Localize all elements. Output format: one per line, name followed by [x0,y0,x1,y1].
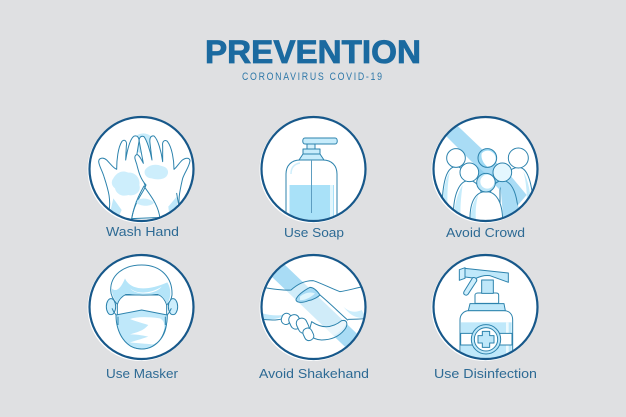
label: Avoid Crowd [446,225,525,240]
icon: washing hands [99,133,190,222]
ring [434,117,538,221]
panel: use soap [260,117,366,240]
label: Avoid Shakehand [259,366,369,381]
icon: spray bottle [459,268,513,362]
ring [434,255,538,359]
icon: crowd crossed out [442,123,533,222]
panel: wash hand [88,117,194,239]
ring [262,117,366,221]
icon: soap bottle [286,138,337,225]
label: Use Soap [284,225,344,240]
panel: avoid crowd [432,117,538,240]
label: Use Disinfection [434,366,537,381]
label: Wash Hand [106,224,179,239]
panel: use masker [88,255,194,381]
icon: handshake crossed out [262,263,367,348]
label: Use Masker [106,366,179,381]
ring [262,255,366,359]
panel: avoid shakehand [259,255,369,381]
panel: use disinfection [432,255,538,381]
ring [90,117,194,221]
title: PREVENTION [205,34,421,70]
ring [90,255,194,359]
icon: face with mask [106,265,178,349]
subtitle: CORONAVIRUS COVID-19 [242,71,382,83]
